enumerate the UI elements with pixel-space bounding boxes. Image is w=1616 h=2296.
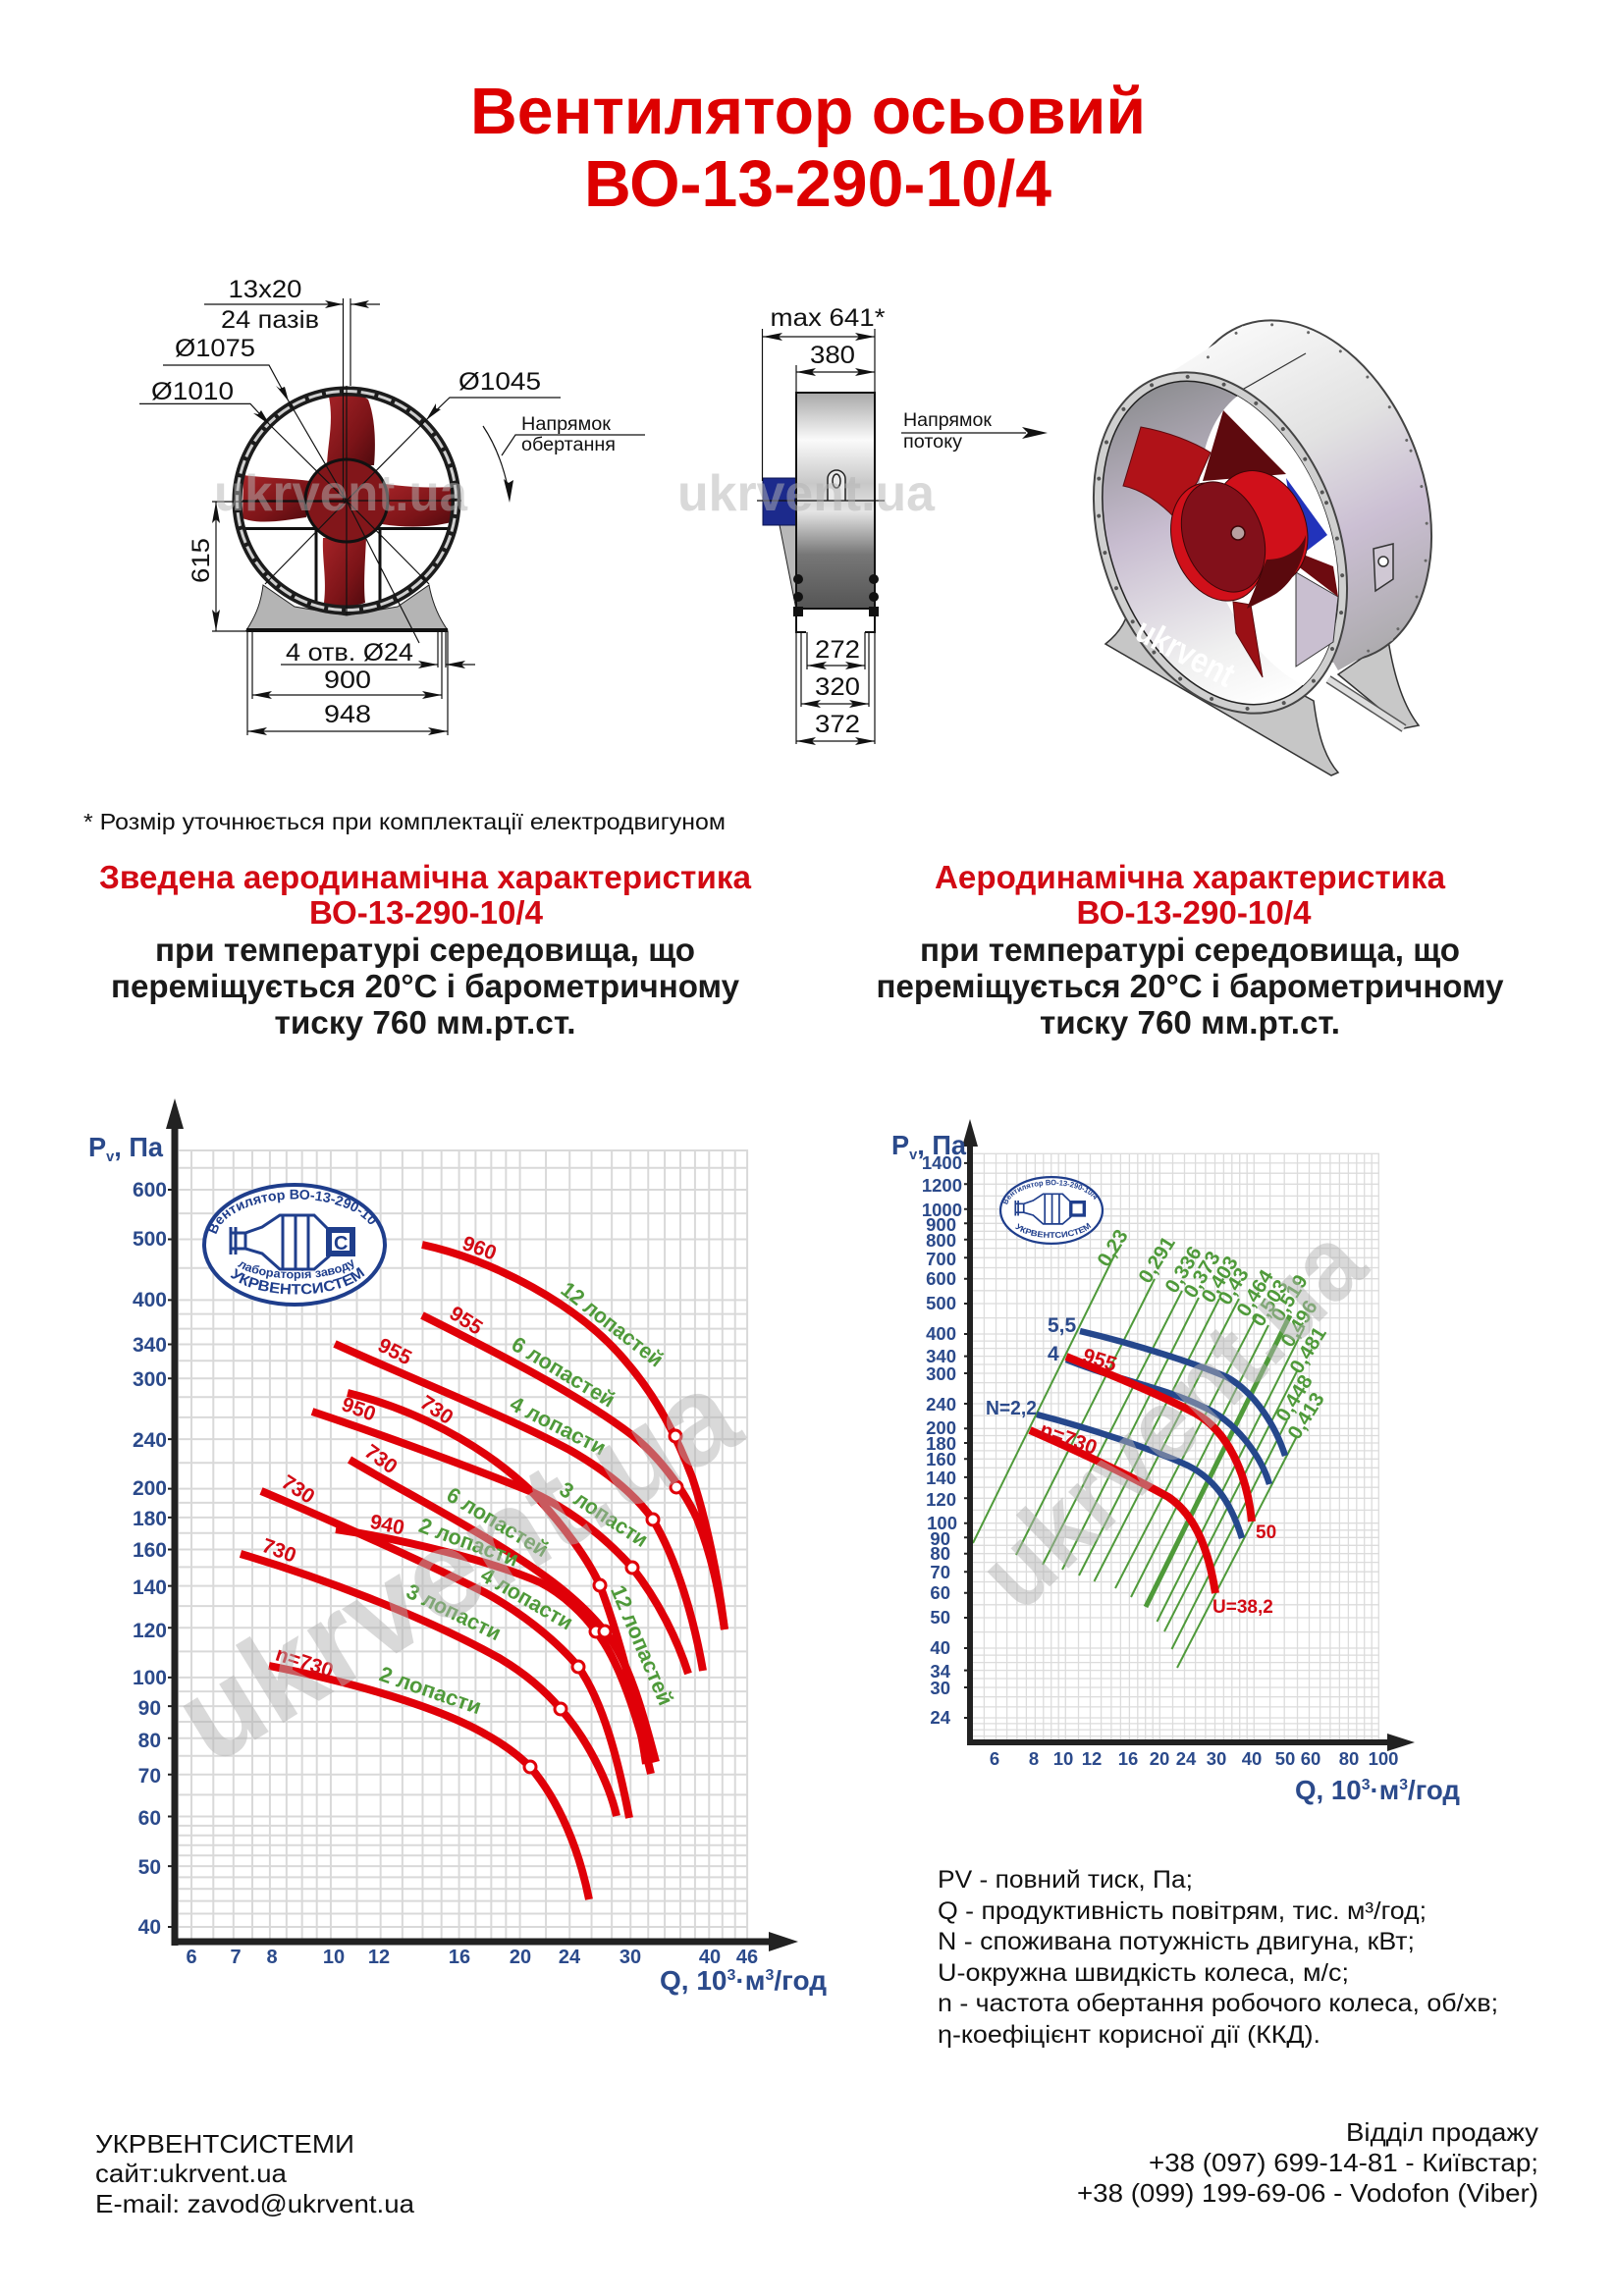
curve labels: 4 xyxy=(1048,1343,1059,1365)
dimension D1010 xyxy=(139,378,270,425)
y axis labels: 30 xyxy=(930,1678,950,1698)
rear tie bar xyxy=(1328,679,1404,728)
flow direction label: потоку xyxy=(903,432,963,453)
y axis labels: 900 xyxy=(926,1214,956,1235)
dimension 13x20: 13x20 xyxy=(228,276,302,303)
speed curve 955 xyxy=(1066,1357,1252,1522)
side view drawing xyxy=(757,304,1048,745)
efficiency labels: 0,23 xyxy=(1093,1226,1133,1271)
x axis labels xyxy=(990,1748,1398,1769)
stamp logo: Вентилятор ВО-13-290-10/4 xyxy=(1003,1180,1098,1204)
curve: 730, 6 blades xyxy=(350,1460,656,1762)
curve labels: 955 xyxy=(1080,1344,1120,1376)
dimension 948 xyxy=(247,631,448,735)
footer: sales department: Відділ продажу xyxy=(1346,2117,1538,2147)
power curve 5.5 xyxy=(1080,1331,1285,1456)
panel seam xyxy=(1230,353,1306,397)
x axis labels: 20 xyxy=(510,1947,531,1968)
right heading: Аеродинамічна характеристика xyxy=(935,859,1446,895)
x axis labels: 10 xyxy=(323,1947,345,1968)
y axis labels: 100 xyxy=(133,1667,167,1689)
curve labels: speeds: 730 xyxy=(278,1470,318,1509)
x axis labels xyxy=(186,1947,758,1968)
left heading: тиску 760 мм.рт.ст. xyxy=(275,1004,575,1041)
dimension 320: 320 xyxy=(815,673,860,701)
efficiency labels xyxy=(1093,1226,1331,1443)
dimension D1075: Ø1075 xyxy=(175,335,255,362)
rear flange bolts xyxy=(1138,290,1472,692)
curve labels: blades: 2 лопасти xyxy=(415,1513,522,1572)
x axis title: 3 xyxy=(1362,1777,1371,1793)
legend: PV - повний тиск, Па; xyxy=(938,1866,1193,1894)
y axis labels: 800 xyxy=(926,1230,956,1251)
y axis labels: 500 xyxy=(926,1293,956,1313)
x axis labels: 8 xyxy=(266,1947,278,1968)
footer: company contacts xyxy=(95,2129,415,2218)
y axis labels: 1400 xyxy=(922,1152,962,1173)
y axis labels: 400 xyxy=(926,1323,956,1344)
efficiency lines xyxy=(973,1250,1304,1668)
y axis labels: 1200 xyxy=(922,1175,962,1196)
x axis labels: 24 xyxy=(559,1947,581,1968)
curve labels: speeds xyxy=(259,1232,500,1682)
y axis labels: 50 xyxy=(138,1856,161,1879)
x axis labels: 40 xyxy=(1242,1748,1262,1769)
dimension 272 xyxy=(807,632,865,669)
dimension max 641 xyxy=(762,304,886,481)
y axis labels: 40 xyxy=(138,1916,161,1939)
y axis labels: 100 xyxy=(927,1513,957,1533)
x axis labels: 16 xyxy=(1118,1748,1138,1769)
efficiency labels: 0,43 xyxy=(1213,1264,1254,1309)
y axis labels: 240 xyxy=(133,1429,167,1452)
x axis title: ·м xyxy=(1371,1775,1399,1805)
stamp logo: С xyxy=(334,1233,348,1255)
x axis labels: 12 xyxy=(368,1947,390,1968)
dimension holes: 4 отв. Ø24 xyxy=(286,639,413,667)
right heading: ВО-13-290-10/4 xyxy=(1076,894,1312,931)
stamp logo: УКРВЕНТСИСТЕМИ xyxy=(230,1266,365,1294)
stamp logo: лабораторія заводу xyxy=(238,1258,353,1281)
footer: company contacts: УКРВЕНТСИСТЕМИ xyxy=(95,2129,354,2159)
efficiency labels: 0,519 xyxy=(1266,1271,1313,1325)
y axis labels: 24 xyxy=(930,1707,951,1728)
rotation direction label: Напрямок xyxy=(521,414,612,435)
curve labels: n=730 xyxy=(1037,1418,1100,1460)
y axis labels: 180 xyxy=(133,1508,167,1530)
efficiency labels: 0,373 xyxy=(1179,1248,1225,1302)
curve: 955, 6 blades xyxy=(422,1315,725,1629)
watermark: ukrvent.ua xyxy=(956,1203,1388,1630)
x axis labels: 6 xyxy=(990,1748,999,1769)
curve labels: speeds: 950 xyxy=(339,1393,379,1426)
curve labels: blades: 6 лопастей xyxy=(508,1331,619,1413)
x axis title: ·м xyxy=(735,1965,765,1996)
curve labels: blades xyxy=(376,1277,678,1719)
curve labels: N=2,2 xyxy=(986,1398,1037,1419)
dimension 615 xyxy=(188,502,347,631)
dimension 372: 372 xyxy=(815,711,860,738)
x axis labels: 20 xyxy=(1150,1748,1169,1769)
mounting ear xyxy=(828,470,845,501)
3D fan illustration xyxy=(1092,319,1433,776)
power curve 2.2 xyxy=(1037,1415,1242,1538)
right heading: переміщується 20°С і барометричному xyxy=(876,968,1504,1004)
y axis xyxy=(962,1119,978,1745)
curve: 730, 3 blades xyxy=(241,1554,617,1816)
curve labels: 50 xyxy=(1256,1522,1276,1543)
duct shell xyxy=(1178,320,1431,662)
left heading: Зведена аеродинамічна характеристика xyxy=(99,859,752,895)
y axis xyxy=(166,1098,184,1946)
footer: sales department: +38 (099) 199-69-06 - Vodofon (Viber) xyxy=(1077,2178,1538,2208)
y axis labels: 140 xyxy=(133,1576,167,1599)
dimension 320 xyxy=(801,632,869,708)
dimension D1045 xyxy=(426,368,561,420)
left chart xyxy=(88,1098,827,1996)
flow direction label xyxy=(901,410,1048,453)
y axis labels: 80 xyxy=(930,1543,950,1564)
curve labels: speeds: 955 xyxy=(374,1334,415,1370)
curve labels: U=38,2 xyxy=(1212,1597,1273,1618)
x axis labels: 80 xyxy=(1339,1748,1359,1769)
dimension 372 xyxy=(796,632,875,745)
dimension 13x20 xyxy=(204,276,380,334)
footer: company contacts: сайт:ukrvent.ua xyxy=(95,2159,288,2188)
dimension 900 xyxy=(252,631,442,699)
base plate xyxy=(246,628,448,632)
curve labels: blades: 4 лопасти xyxy=(476,1563,577,1634)
motor xyxy=(763,478,796,525)
left heading: ВО-13-290-10/4 xyxy=(309,894,544,931)
x axis title: Q, 10 xyxy=(660,1965,727,1996)
watermark: ukrvent.ua xyxy=(152,1342,762,1790)
x axis labels: 8 xyxy=(1029,1748,1039,1769)
footer: company contacts: E-mail: zavod@ukrvent.ua xyxy=(95,2189,415,2218)
y axis labels: 340 xyxy=(133,1334,167,1357)
curve labels: blades: 3 лопасти xyxy=(403,1578,506,1645)
y axis title: , Па xyxy=(917,1130,966,1160)
y axis labels: 600 xyxy=(133,1179,167,1201)
efficiency labels: 0,464 xyxy=(1232,1265,1278,1320)
efficiency labels: 0,496 xyxy=(1276,1297,1322,1351)
efficiency labels: 0,413 xyxy=(1283,1389,1329,1443)
efficiency labels: 0,503 xyxy=(1247,1276,1293,1330)
efficiency markers xyxy=(524,1430,682,1773)
mounting ear xyxy=(1374,544,1393,591)
y axis title: v xyxy=(909,1147,918,1163)
x axis labels: 46 xyxy=(736,1947,758,1968)
curve labels: speeds: 955 xyxy=(446,1302,487,1340)
y axis labels: 300 xyxy=(133,1368,167,1391)
legend: η-коефіцієнт корисної дії (ККД). xyxy=(938,2021,1320,2049)
x axis title: 3 xyxy=(1399,1777,1408,1793)
y axis labels: 160 xyxy=(133,1539,167,1562)
y axis labels: 60 xyxy=(930,1582,950,1603)
efficiency labels: 0,448 xyxy=(1271,1371,1318,1425)
curve: 955, 4 blades xyxy=(335,1344,703,1671)
y axis labels: 60 xyxy=(138,1807,161,1830)
curve: 730, 2 blades xyxy=(269,1666,589,1899)
curve: 950, 3 blades xyxy=(312,1412,688,1674)
rotation direction label: обертання xyxy=(521,435,616,455)
title: ВО-13-290-10/4 xyxy=(584,147,1051,221)
x axis title: /год xyxy=(1408,1775,1460,1805)
size footnote: * Розмір уточнюється при комплектації електродвигуном xyxy=(83,809,726,834)
y axis labels: 160 xyxy=(926,1449,956,1469)
y axis labels: 500 xyxy=(133,1228,167,1251)
speed curve 730 xyxy=(1030,1430,1215,1593)
y axis labels: 240 xyxy=(926,1394,956,1415)
curve labels: blades: 12 лопастей xyxy=(557,1277,669,1371)
y axis labels: 400 xyxy=(133,1289,167,1311)
stamp logo xyxy=(999,1176,1104,1245)
x axis labels: 60 xyxy=(1301,1748,1320,1769)
x axis title: /год xyxy=(774,1965,827,1996)
y axis labels: 40 xyxy=(930,1637,950,1658)
y axis title: , Па xyxy=(114,1132,163,1162)
motor xyxy=(1286,478,1327,552)
bolts xyxy=(793,574,879,616)
y axis labels: 80 xyxy=(138,1730,161,1752)
curve labels: 5,5 xyxy=(1048,1314,1077,1337)
curve: 730, 12 blades xyxy=(348,1393,646,1764)
x axis labels: 30 xyxy=(1207,1748,1226,1769)
flow direction label: Напрямок xyxy=(903,410,993,431)
x axis labels: 24 xyxy=(1176,1748,1197,1769)
x axis labels: 12 xyxy=(1082,1748,1102,1769)
strut frame xyxy=(242,528,454,603)
dimension 900: 900 xyxy=(324,667,371,694)
stand wedge xyxy=(780,525,796,610)
title: Вентилятор осьовий xyxy=(470,75,1146,148)
blades xyxy=(1203,410,1286,481)
title xyxy=(470,75,1146,221)
dimension 380 xyxy=(796,342,875,393)
y axis labels: 200 xyxy=(926,1417,956,1438)
stamp logo: УКРВЕНТСИСТЕМИ xyxy=(1015,1223,1092,1238)
curve labels: blades: 12 лопастей xyxy=(606,1581,678,1709)
x axis title: 3 xyxy=(727,1967,736,1984)
curve labels: speeds: n=730 xyxy=(273,1643,336,1682)
y axis title: P xyxy=(891,1130,910,1160)
curve labels: speeds: 730 xyxy=(360,1440,402,1478)
y axis labels: 140 xyxy=(926,1468,956,1488)
dimension 13x20: 24 пазів xyxy=(221,306,319,334)
left heading xyxy=(99,859,752,1041)
construction lines xyxy=(242,298,461,643)
x axis labels: 40 xyxy=(699,1947,721,1968)
x axis labels: 30 xyxy=(619,1947,641,1968)
curve: 730, 4 blades xyxy=(261,1491,629,1818)
curve: 960, 12 blades xyxy=(422,1245,725,1629)
dimension 615: 615 xyxy=(188,538,215,583)
right heading: при температурі середовища, що xyxy=(920,932,1460,968)
y axis title: v xyxy=(106,1148,115,1165)
y axis labels: 300 xyxy=(926,1363,956,1384)
efficiency labels: 0,336 xyxy=(1160,1243,1207,1297)
flange ring xyxy=(238,391,456,611)
dimension holes xyxy=(281,631,475,668)
curve labels: blades: 4 лопасти xyxy=(507,1391,610,1461)
footer: sales department: +38 (097) 699-14-81 - Київстар; xyxy=(1149,2148,1538,2177)
legend: U-окружна швидкість колеса, м/с; xyxy=(938,1959,1349,1987)
y axis labels: 180 xyxy=(926,1433,956,1454)
curve: 940, 2 blades xyxy=(336,1529,651,1774)
x axis xyxy=(967,1734,1415,1751)
dimension 272: 272 xyxy=(815,636,860,664)
curve labels: blades: 2 лопасти xyxy=(376,1662,485,1719)
drawing watermarks xyxy=(214,465,936,522)
front view drawing xyxy=(139,276,645,735)
y axis labels: 70 xyxy=(930,1562,950,1582)
y axis labels: 90 xyxy=(930,1528,950,1549)
drawing watermarks: ukrvent.ua xyxy=(214,465,468,522)
feet xyxy=(796,614,875,632)
legend: n - частота обертання робочого колеса, об/хв; xyxy=(938,1990,1498,2017)
y axis labels: 340 xyxy=(926,1346,956,1366)
y axis labels: 700 xyxy=(926,1249,956,1269)
rotation direction label xyxy=(483,414,645,503)
y axis labels: 34 xyxy=(930,1661,951,1682)
y axis labels: 600 xyxy=(926,1268,956,1289)
curve labels: speeds: 730 xyxy=(259,1534,299,1568)
y axis labels: 120 xyxy=(926,1489,956,1510)
y axis labels xyxy=(922,1152,962,1728)
x axis labels: 6 xyxy=(186,1947,197,1968)
x axis labels: 16 xyxy=(449,1947,470,1968)
efficiency labels: 0,291 xyxy=(1134,1233,1180,1287)
legend: Q - продуктивність повітрям, тис. м³/год; xyxy=(938,1897,1427,1925)
x axis title: 3 xyxy=(765,1967,774,1984)
dimension D1010: Ø1010 xyxy=(151,378,234,405)
right chart xyxy=(891,1119,1460,1805)
legend: N - споживана потужність двигуна, кВт; xyxy=(938,1928,1415,1955)
curve labels: speeds: 960 xyxy=(459,1232,500,1265)
support plate xyxy=(1296,572,1338,667)
left heading: при температурі середовища, що xyxy=(155,932,695,968)
x axis labels: 7 xyxy=(230,1947,242,1968)
front flange and interior xyxy=(1092,371,1349,715)
dimension 948: 948 xyxy=(324,701,371,728)
y axis labels xyxy=(133,1179,167,1939)
drawing watermarks: ukrvent.ua xyxy=(677,465,936,522)
y axis labels: 1000 xyxy=(922,1200,962,1220)
right heading: тиску 760 мм.рт.ст. xyxy=(1040,1004,1340,1041)
hub xyxy=(305,459,388,542)
front leg xyxy=(1105,600,1338,775)
stand base xyxy=(246,585,448,630)
y axis title: P xyxy=(88,1132,107,1162)
right heading xyxy=(876,859,1504,1041)
efficiency labels: 0,403 xyxy=(1197,1253,1243,1307)
curve labels xyxy=(986,1314,1276,1618)
y axis labels: 200 xyxy=(133,1477,167,1500)
y axis labels: 90 xyxy=(138,1697,161,1720)
dimension D1045: Ø1045 xyxy=(458,368,541,396)
curve labels: blades: 6 лопастей xyxy=(443,1482,553,1562)
power curve 4 xyxy=(1066,1360,1269,1484)
hub xyxy=(1155,457,1323,614)
x axis xyxy=(172,1932,798,1951)
y axis labels: 70 xyxy=(138,1765,161,1788)
fan blades xyxy=(242,393,454,606)
footer: sales department xyxy=(1077,2117,1538,2208)
legend xyxy=(938,1866,1498,2049)
stamp logo: Вентилятор ВО-13-290-10 xyxy=(208,1190,375,1235)
x axis labels: 50 xyxy=(1275,1748,1295,1769)
curve labels: speeds: 940 xyxy=(368,1511,406,1540)
rear leg xyxy=(1338,640,1419,728)
x axis title: Q, 10 xyxy=(1295,1775,1362,1805)
dimension max 641: max 641* xyxy=(770,304,886,332)
curve labels: blades: 3 лопасти xyxy=(556,1476,653,1552)
duct body xyxy=(796,393,875,609)
stamp logo xyxy=(202,1183,387,1307)
y axis labels: 120 xyxy=(133,1620,167,1642)
dimension D1075 xyxy=(163,335,289,401)
x axis labels: 10 xyxy=(1053,1748,1073,1769)
efficiency labels: 0,481 xyxy=(1285,1323,1331,1377)
y axis labels: 50 xyxy=(930,1607,950,1628)
left heading: переміщується 20°С і барометричному xyxy=(111,968,740,1004)
dimension 380: 380 xyxy=(810,342,855,369)
curve labels: speeds: 730 xyxy=(416,1391,458,1429)
stand watermark: ukrvent xyxy=(1129,610,1242,695)
x axis labels: 100 xyxy=(1369,1748,1398,1769)
